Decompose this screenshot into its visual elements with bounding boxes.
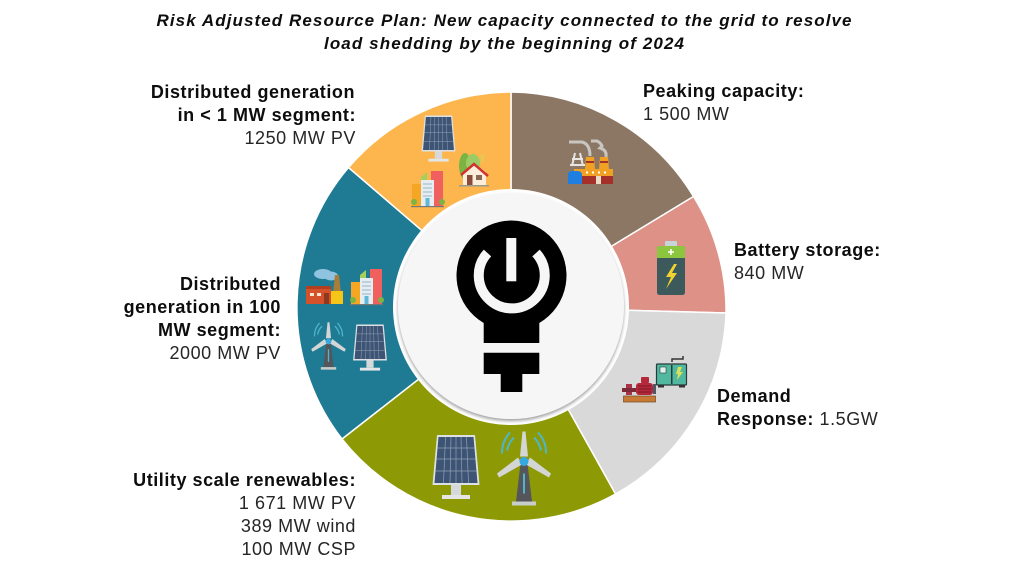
- label: distributed generation under 1 MW: 1250 MW PV: [244, 128, 356, 148]
- icon: factory: [306, 269, 343, 304]
- segment: battery storage: [511, 196, 726, 313]
- icon: buildings, teal segment: [350, 269, 384, 305]
- label: utility scale renewables: Utility scale renewables:: [133, 470, 356, 490]
- segment: demand response: [511, 307, 726, 494]
- label: battery storage: [734, 240, 881, 283]
- title: Risk Adjusted Resource Plan: New capacity connected to the grid to resolve: [156, 11, 852, 30]
- label: distributed generation 100 MW: MW segment:: [158, 320, 281, 340]
- icon: house: [459, 153, 489, 186]
- label: distributed generation under 1 MW: in < 1 MW segment:: [178, 105, 356, 125]
- label: distributed generation 100 MW: 2000 MW PV: [169, 343, 281, 363]
- label: battery storage: Battery storage:: [734, 240, 881, 260]
- label: utility scale renewables: 389 MW wind: [241, 516, 356, 536]
- label: battery storage: 840 MW: [734, 263, 804, 283]
- icon: water pump: [622, 377, 656, 402]
- label: distributed generation 100 MW: Distributed: [180, 274, 281, 294]
- icon: wind turbine, olive segment: [497, 432, 551, 506]
- icon: wind turbine, teal segment: [311, 322, 346, 370]
- label: peaking capacity: Peaking capacity:: [643, 81, 804, 101]
- label: peaking capacity: [643, 81, 804, 124]
- center circle: [393, 189, 629, 425]
- label: demand response: Response: 1.5GW: [717, 409, 878, 429]
- label: demand response: Demand: [717, 386, 791, 406]
- icon: generator: [656, 356, 686, 388]
- icon: buildings: [411, 171, 445, 207]
- segment: utility scale renewables: [342, 307, 616, 521]
- segment: distributed generation under 1 MW: [348, 92, 511, 307]
- icon: power plant: [568, 141, 613, 184]
- icon: solar panel, teal segment: [353, 324, 387, 371]
- icon: power bulb: [456, 221, 566, 392]
- label: demand response: [717, 386, 878, 429]
- segment: peaking capacity: [511, 92, 694, 307]
- donut chart: [297, 92, 726, 521]
- title: load shedding by the beginning of 2024: [324, 34, 685, 53]
- icon: solar panel, small: [422, 116, 455, 162]
- icon: battery: [657, 241, 685, 295]
- title: [156, 11, 852, 53]
- label: distributed generation 100 MW: generation in 100: [124, 297, 281, 317]
- icon: solar panel, olive segment: [432, 435, 480, 499]
- segment: distributed generation 100 MW: [297, 168, 511, 439]
- label: utility scale renewables: [133, 470, 356, 559]
- label: distributed generation under 1 MW: Distributed generation: [151, 82, 355, 102]
- label: utility scale renewables: 1 671 MW PV: [239, 493, 356, 513]
- label: distributed generation 100 MW: [124, 274, 281, 363]
- label: utility scale renewables: 100 MW CSP: [241, 539, 356, 559]
- label: peaking capacity: 1 500 MW: [643, 104, 729, 124]
- label: distributed generation under 1 MW: [151, 82, 356, 148]
